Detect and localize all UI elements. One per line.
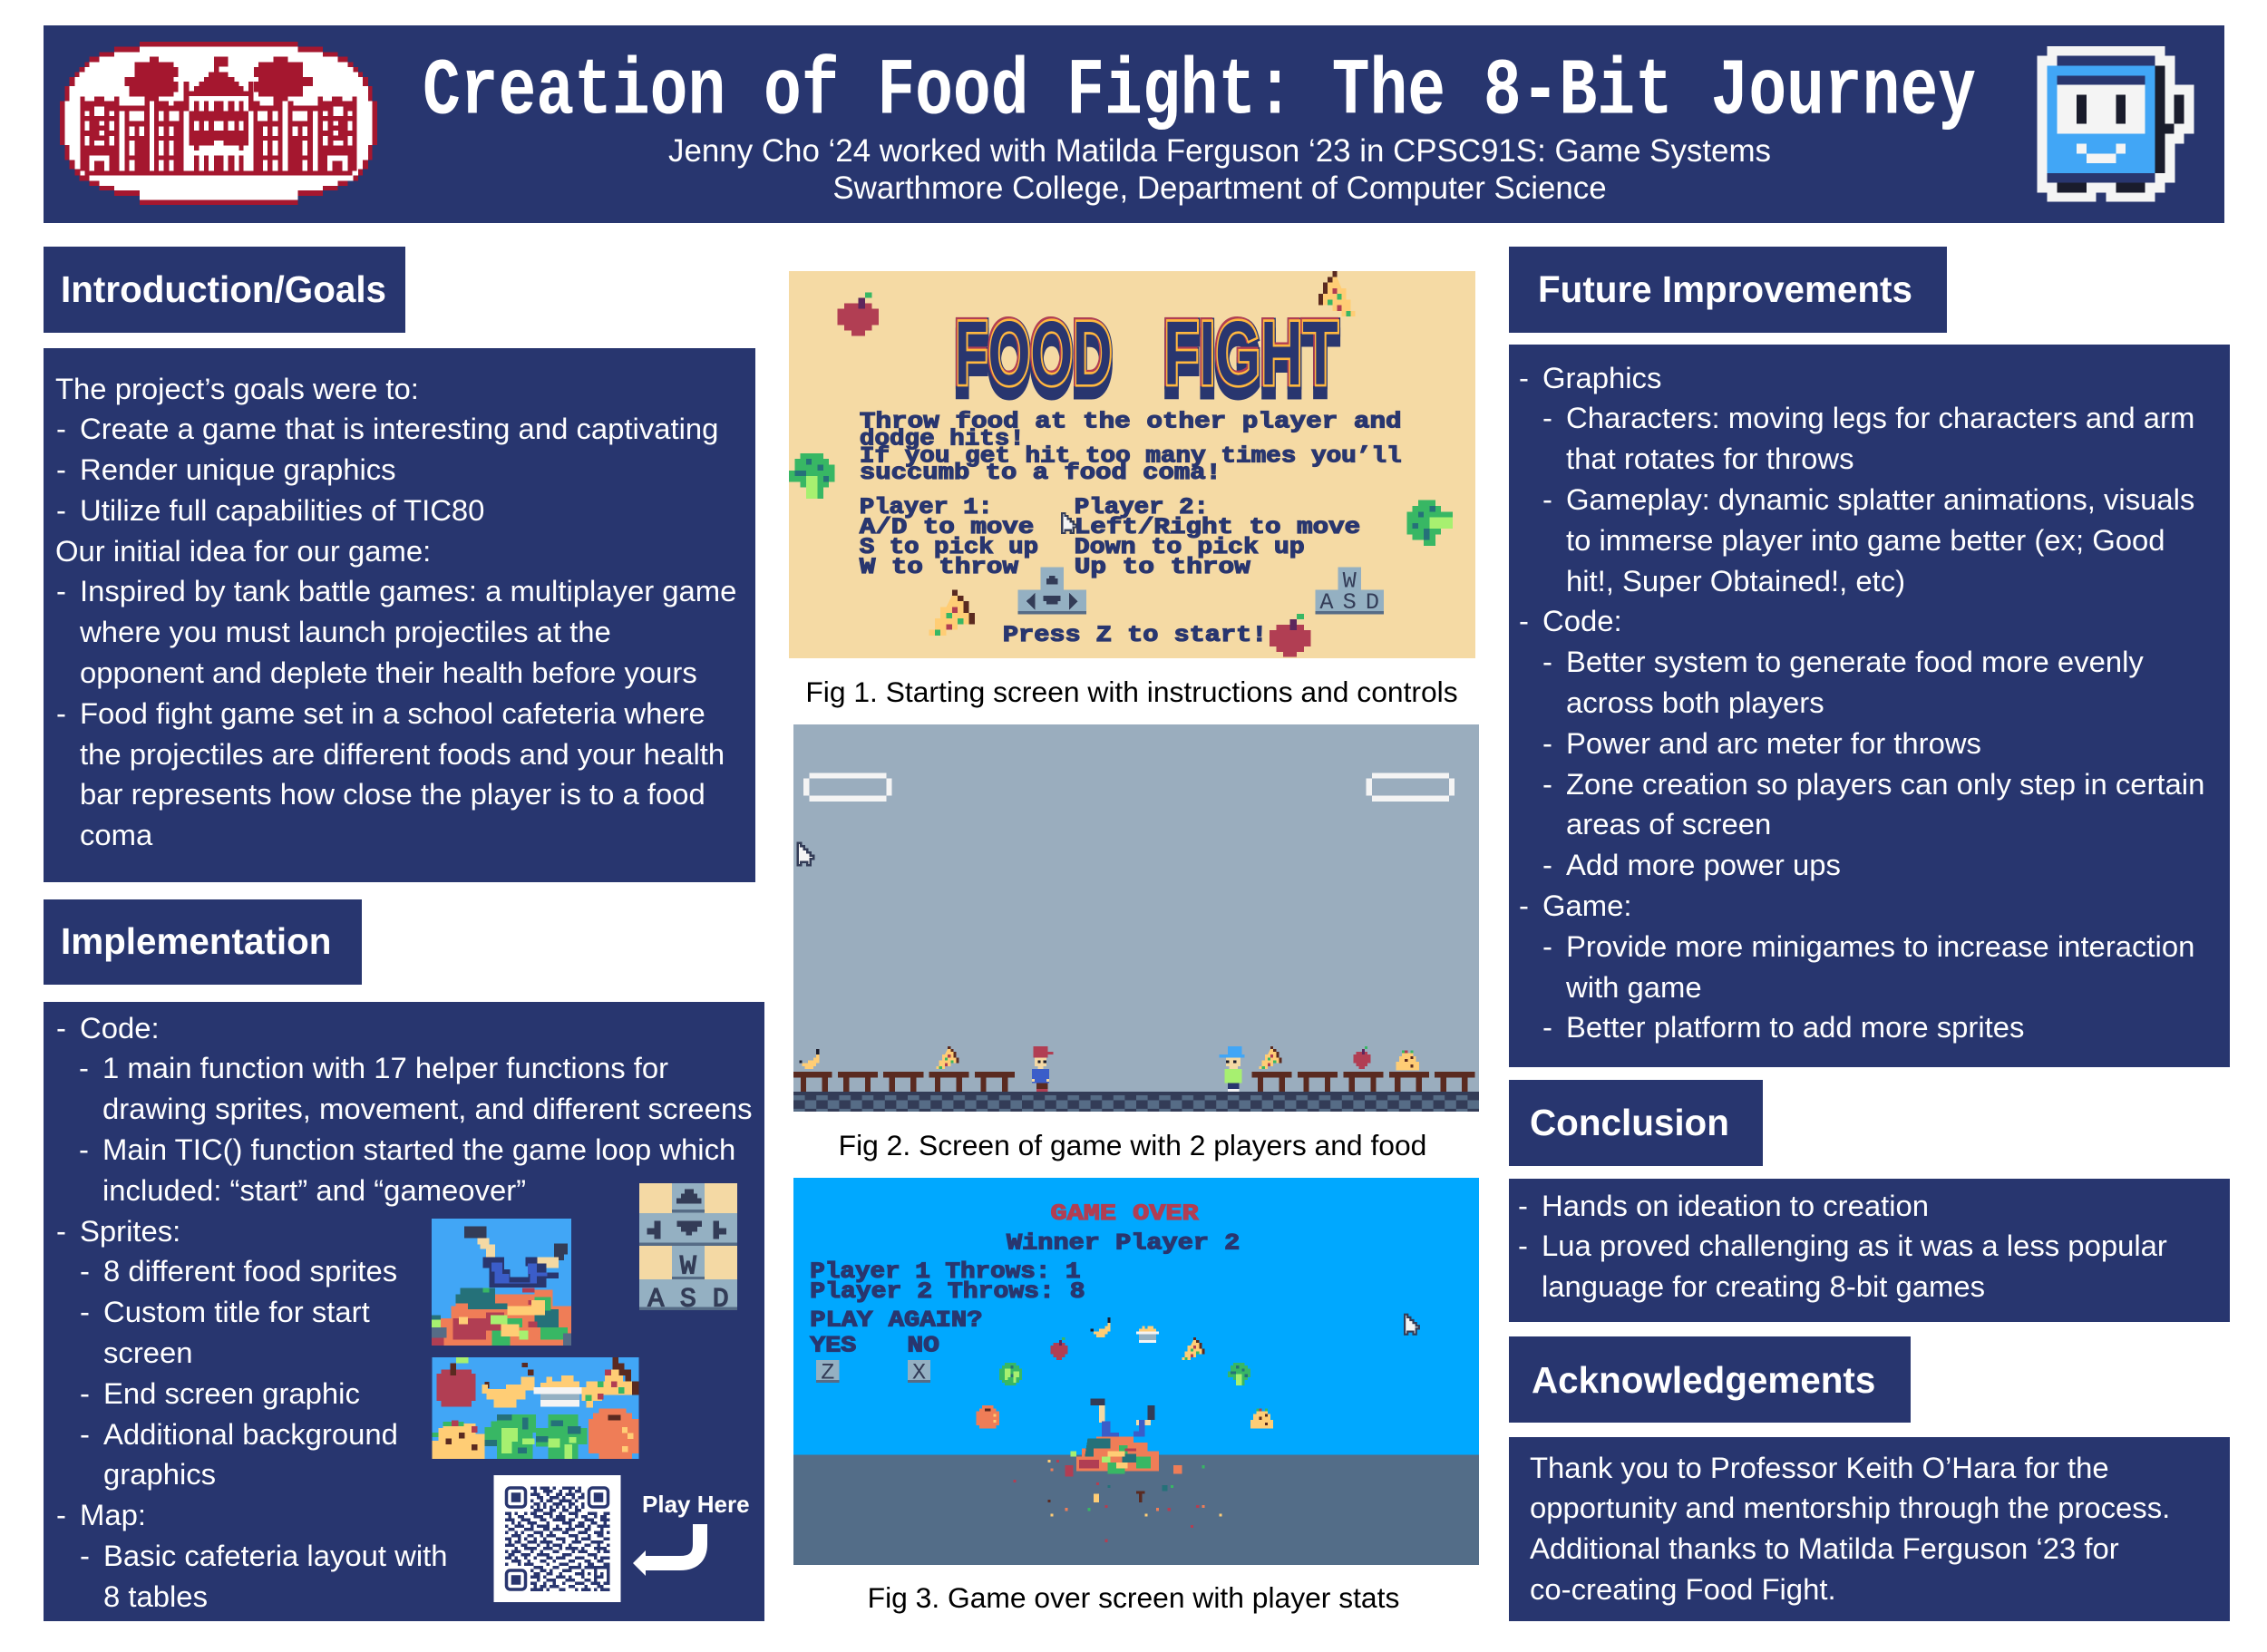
QR code: [493, 1475, 620, 1602]
header banner: [44, 25, 2224, 223]
panel: introduction text: -: [56, 412, 66, 445]
heading: Conclusion: Conclusion: [1530, 1102, 1729, 1143]
panel: future improvements text: Code:: [1542, 604, 1622, 637]
heading: Future Improvements: Future Improvements: [1538, 268, 1912, 310]
food sprites: [789, 271, 1453, 657]
panel: implementation text: 8 different food sprites: [103, 1254, 397, 1288]
cursor: [798, 843, 813, 865]
panel: introduction text: coma: [80, 818, 152, 851]
instructions: Throw food at the other player and: [860, 410, 1402, 435]
figure 3: game over screen: [793, 1178, 1479, 1565]
player stats and replay prompt: PLAY AGAIN?: [810, 1307, 983, 1333]
panel: future improvements text: with game: [1566, 970, 1702, 1004]
panel: future improvements text: Better system to generate food more evenly: [1566, 645, 2144, 678]
panel: implementation text: drawing sprites, movement, and different screens: [102, 1092, 753, 1125]
cursor: [1405, 1315, 1419, 1335]
panel: implementation text: 1 main function with 17 helper functions for: [102, 1051, 668, 1084]
panel: implementation text: -: [56, 1498, 66, 1531]
panel: implementation text: -: [80, 1417, 90, 1451]
panel: future improvements text: Graphics: [1542, 361, 1661, 394]
panel: implementation text: 8 tables: [103, 1579, 208, 1613]
panel: future improvements text: Add more power ups: [1566, 848, 1841, 881]
caption: figure 2: Fig 2. Screen of game with 2 players and food: [839, 1129, 1426, 1161]
panel: future improvements text: -: [1519, 604, 1529, 637]
panel: future improvements text: -: [1542, 401, 1552, 434]
panel: future improvements text: -: [1542, 929, 1552, 963]
sprite: eight foods: [432, 1357, 638, 1459]
panel: introduction text: opponent and deplete their health before yours: [80, 656, 697, 689]
panel: introduction text: the projectiles are different foods and your health: [80, 737, 725, 771]
panel: future improvements text: -: [1542, 482, 1552, 516]
panel: implementation text: -: [79, 1051, 89, 1084]
panel: conclusion text: language for creating 8-bit games: [1542, 1269, 1985, 1303]
panel: conclusion text: Hands on ideation to creation: [1542, 1189, 1929, 1222]
panel: acknowledgements text: [1509, 1437, 2230, 1621]
panel: future improvements text: Zone creation so players can only step in certain: [1566, 767, 2204, 801]
panel: introduction text: The project’s goals were to:: [55, 372, 419, 404]
food fight logo: FOOD: [955, 303, 1113, 404]
panel: acknowledgements text: co-creating Food Fight.: [1530, 1572, 1836, 1606]
instructions: Left/Right to move: [1075, 515, 1360, 540]
panel: future improvements text: -: [1542, 767, 1552, 801]
figure 3: game over screen: X: [912, 1359, 926, 1385]
caption: figure 1: Fig 1. Starting screen with instructions and controls: [805, 675, 1458, 708]
player stats and replay prompt: Winner Player 2: [1007, 1231, 1240, 1256]
panel: future improvements text: across both players: [1566, 685, 1824, 719]
panel: introduction text: bar represents how close the player is to a food: [80, 777, 705, 811]
panel: future improvements text: [1509, 345, 2230, 1067]
panel: future improvements text: to immerse player into game better (ex; Good: [1566, 523, 2165, 557]
food fight logo: FIGHT: [1163, 304, 1338, 405]
label: Play Here: Play Here: [642, 1491, 750, 1518]
panel: implementation text: included: “start” and “gameover”: [102, 1173, 526, 1207]
panel: future improvements text: Gameplay: dynamic splatter animations, visuals: [1566, 482, 2194, 516]
player 1: [1032, 1046, 1054, 1092]
panel: introduction text: where you must launch projectiles at the: [80, 615, 611, 648]
food fight logo: FIGHT: [1163, 303, 1338, 404]
panel: introduction text: Create a game that is interesting and captivating: [80, 412, 718, 445]
title: Creation of Food Fight: The 8-Bit Journey: [423, 48, 1976, 138]
player 2: [1219, 1046, 1245, 1092]
instructions: [860, 410, 1402, 648]
instructions: W to throw: [860, 555, 1018, 580]
panel: implementation text: [44, 1002, 764, 1621]
panel: implementation text: graphics: [103, 1457, 216, 1491]
panel: implementation text: screen: [103, 1336, 193, 1369]
player on food pile: [1071, 1398, 1159, 1474]
player stats and replay prompt: [810, 1231, 1240, 1359]
panel: implementation text: Map:: [80, 1498, 146, 1531]
heading: Conclusion: [1509, 1080, 1763, 1166]
heading: Introduction/Goals: [44, 247, 405, 333]
food splatter: [1014, 1460, 1222, 1542]
panel: introduction text: Render unique graphics: [80, 452, 396, 486]
panel: future improvements text: Better platform to add more sprites: [1566, 1010, 2024, 1044]
food fight logo: [954, 302, 1338, 415]
instructions: succumb to a food coma!: [860, 461, 1221, 486]
panel: introduction text: [44, 348, 755, 882]
food fight logo: FIGHT: [1163, 314, 1338, 415]
panel: conclusion text: -: [1518, 1229, 1528, 1262]
game over text: GAME OVER: [1050, 1201, 1199, 1227]
panel: future improvements text: Power and arc meter for throws: [1566, 726, 1981, 760]
logo: pixel college seal: [60, 42, 377, 205]
instructions: S to pick up: [860, 535, 1038, 560]
panel: implementation text: -: [56, 1214, 66, 1248]
food fight logo: FOOD: [955, 304, 1112, 405]
panel: implementation text: Custom title for start: [103, 1295, 370, 1328]
panel: implementation text: -: [79, 1132, 89, 1166]
food fight logo: FIGHT: [1164, 303, 1338, 404]
panel: introduction text: Food fight game set in a school cafeteria where: [80, 696, 705, 730]
panel: implementation text: -: [80, 1376, 90, 1410]
heading: Future Improvements: [1509, 247, 1947, 333]
instructions: A/D to move: [860, 515, 1034, 540]
panel: implementation text: Code:: [80, 1011, 160, 1045]
panel: implementation text: Additional background: [103, 1417, 398, 1451]
foods on tables: [799, 1046, 1419, 1070]
sprite: control keys: W: [680, 1251, 696, 1282]
panel: future improvements text: -: [1542, 848, 1552, 881]
instructions: Player 1:: [860, 495, 993, 520]
panel: conclusion text: Lua proved challenging as it was a less popular: [1542, 1229, 2167, 1262]
figure 2: gameplay screen: [793, 724, 1479, 1112]
instructions: Player 2:: [1075, 495, 1209, 520]
player stats and replay prompt: Player 2 Throws: 8: [810, 1279, 1085, 1305]
tables: [793, 1072, 1474, 1092]
falling foods: [977, 1317, 1273, 1428]
caption: figure 3: Fig 3. Game over screen with player stats: [868, 1581, 1399, 1614]
panel: implementation text: Main TIC() function started the game loop which: [102, 1132, 735, 1166]
panel: future improvements text: -: [1519, 889, 1529, 922]
panel: implementation text: Basic cafeteria layout with: [103, 1539, 448, 1572]
sprite: end screen player on food pile: [432, 1219, 571, 1346]
food fight logo: FIGHT: [1163, 302, 1338, 403]
panel: future improvements text: Characters: moving legs for characters and arm: [1566, 401, 2194, 434]
subtitle: authors: Jenny Cho ‘24 worked with Matilda Ferguson ‘23 in CPSC91S: Game Systems: [668, 133, 1771, 169]
heading: Introduction/Goals: Introduction/Goals: [61, 268, 386, 310]
instructions: Press Z to start!: [1003, 623, 1267, 648]
heading: Acknowledgements: [1509, 1336, 1911, 1423]
panel: implementation text: -: [80, 1295, 90, 1328]
panel: introduction text: -: [56, 452, 66, 486]
instructions: dodge hits!: [860, 427, 1025, 452]
panel: future improvements text: hit!, Super Obtained!, etc): [1566, 564, 1905, 598]
player stats and replay prompt: NO: [907, 1334, 939, 1359]
panel: implementation text: -: [56, 1011, 66, 1045]
panel: future improvements text: -: [1542, 645, 1552, 678]
health bars: [803, 773, 1455, 802]
panel: future improvements text: -: [1542, 1010, 1552, 1044]
panel: future improvements text: -: [1519, 361, 1529, 394]
food fight logo: FOOD: [955, 314, 1112, 415]
panel: introduction text: Utilize full capabilities of TIC80: [80, 493, 484, 527]
instructions: Down to pick up: [1075, 535, 1305, 560]
panel: future improvements text: Game:: [1542, 889, 1632, 922]
instructions: If you get hit too many times you’ll: [860, 443, 1402, 469]
panel: conclusion text: -: [1518, 1189, 1528, 1222]
panel: introduction text: -: [56, 696, 66, 730]
figure 1: starting screen: D: [1366, 589, 1379, 616]
icon: TIC-80 mascot: [2037, 46, 2194, 201]
panel: acknowledgements text: Additional thanks to Matilda Ferguson ‘23 for: [1530, 1531, 2119, 1565]
floor: [793, 1092, 1479, 1112]
panel: implementation text: -: [80, 1539, 90, 1572]
panel: introduction text: -: [56, 493, 66, 527]
panel: implementation text: End screen graphic: [103, 1376, 360, 1410]
panel: acknowledgements text: Thank you to Professor Keith O’Hara for the: [1530, 1451, 2109, 1484]
figure 1: starting screen: [789, 271, 1475, 658]
panel: implementation text: Sprites:: [80, 1214, 180, 1248]
player stats and replay prompt: YES: [810, 1334, 856, 1359]
heading: Implementation: [44, 899, 362, 985]
figure 1: starting screen: S: [1343, 589, 1357, 616]
arrow: to QR code: [633, 1524, 707, 1576]
figure 1: starting screen: A: [1319, 589, 1334, 616]
panel: future improvements text: that rotates for throws: [1566, 442, 1853, 475]
replay keys: [816, 1360, 930, 1383]
figure 1: starting screen: W: [1343, 568, 1357, 594]
panel: implementation text: -: [80, 1254, 90, 1288]
arrow keys and WASD: [1017, 568, 1384, 614]
heading: Acknowledgements: Acknowledgements: [1532, 1359, 1875, 1401]
food fight logo: FOOD: [955, 303, 1112, 404]
heading: Implementation: Implementation: [61, 920, 331, 962]
panel: acknowledgements text: opportunity and mentorship through the process.: [1530, 1491, 2170, 1524]
panel: conclusion text: [1509, 1179, 2230, 1322]
panel: introduction text: -: [56, 574, 66, 607]
sprite: control keys: [639, 1183, 737, 1310]
panel: introduction text: Our initial idea for our game:: [55, 534, 431, 568]
panel: future improvements text: areas of screen: [1566, 807, 1771, 841]
food fight logo: FOOD: [954, 302, 1111, 403]
figure 3: game over screen: Z: [821, 1359, 834, 1385]
panel: introduction text: Inspired by tank battle games: a multiplayer game: [80, 574, 736, 607]
subtitle: department: Swarthmore College, Department of Computer Science: [832, 170, 1607, 206]
instructions: Up to throw: [1075, 555, 1250, 580]
player stats and replay prompt: Player 1 Throws: 1: [810, 1259, 1081, 1285]
panel: future improvements text: Provide more minigames to increase interaction: [1566, 929, 2194, 963]
panel: future improvements text: -: [1542, 726, 1552, 760]
